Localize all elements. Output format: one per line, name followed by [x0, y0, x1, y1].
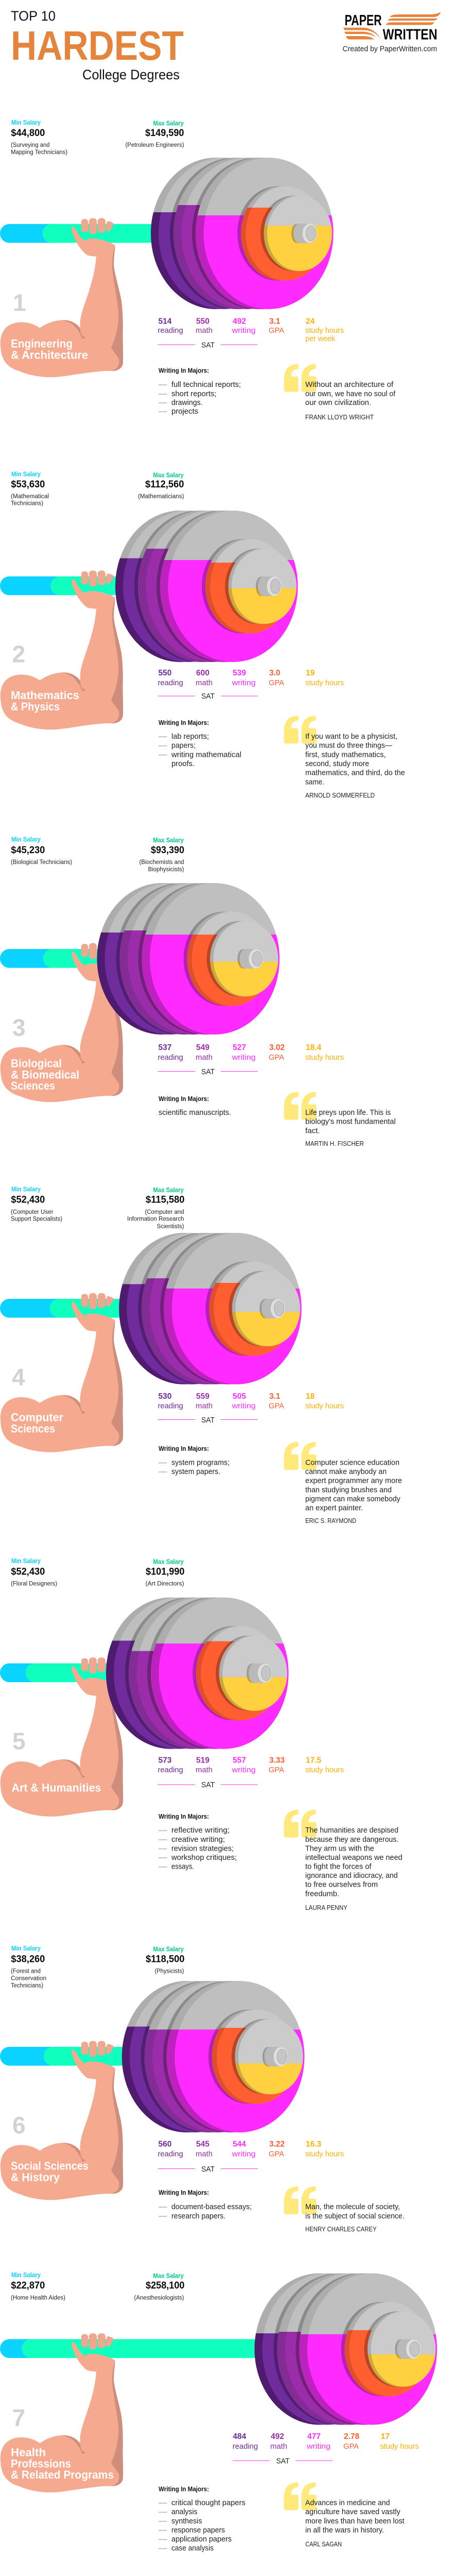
writing in majors: research papers.	[171, 2212, 225, 2221]
salary labels: $53,630	[11, 479, 45, 490]
stats: reading	[158, 1766, 183, 1774]
rank and name: 1	[13, 290, 26, 316]
salary labels	[11, 836, 184, 873]
logo: header: WRITTEN	[383, 27, 438, 43]
stats: 505	[233, 1392, 246, 1401]
stats: GPA	[269, 1402, 284, 1411]
stats	[158, 2140, 344, 2174]
quote	[284, 716, 405, 799]
stats: 492	[233, 317, 246, 326]
stats: 477	[307, 2432, 321, 2441]
stats: math	[196, 679, 213, 687]
stats	[158, 317, 344, 349]
rank and name: Engineering	[11, 337, 73, 350]
rank and name: 2	[12, 641, 25, 668]
writing in majors: creative writing;	[171, 1836, 225, 1844]
stats: 550	[159, 669, 171, 677]
salary labels: $101,990	[146, 1566, 184, 1577]
quote: Advances in medicine and	[305, 2499, 390, 2507]
rank and name: Art & Humanities	[11, 1781, 101, 1794]
quote: LAURA PENNY	[305, 1904, 347, 1911]
quote: same.	[305, 777, 324, 786]
rank and name	[11, 641, 79, 713]
writing in majors: Writing In Majors:	[159, 2485, 209, 2493]
quote	[284, 1810, 403, 1911]
writing in majors: system papers.	[171, 1468, 220, 1476]
stats: reading	[158, 679, 183, 687]
salary bar	[0, 2339, 264, 2358]
salary labels: Max Salary	[153, 120, 184, 127]
stats: 550	[196, 317, 210, 326]
writing in majors	[159, 719, 241, 768]
rank and name: & Biomedical	[11, 1068, 79, 1081]
stats: GPA	[343, 2442, 359, 2451]
stats: 17.5	[306, 1756, 322, 1765]
rank and name: Health	[11, 2446, 46, 2459]
quote	[284, 364, 396, 421]
stats: 3.22	[269, 2140, 285, 2149]
quote: you must do three things—	[305, 741, 392, 750]
rank and name: Sciences	[11, 1422, 55, 1435]
salary labels: $93,390	[151, 845, 184, 856]
stats: SAT	[201, 1416, 215, 1425]
barbell plates	[115, 511, 298, 662]
salary labels: (Anesthesiologists)	[134, 2295, 184, 2301]
salary labels	[11, 471, 184, 507]
salary bar	[0, 577, 128, 595]
stats: SAT	[276, 2456, 289, 2465]
quote: Computer science education	[305, 1458, 399, 1467]
rank and name	[11, 2404, 114, 2481]
salary labels: $52,430	[11, 1194, 45, 1206]
stats: math	[196, 1053, 213, 1062]
stats: study hours	[305, 1766, 344, 1774]
salary labels: (Art Directors)	[145, 1581, 184, 1587]
barbell plates	[122, 1981, 304, 2132]
stats: math	[196, 1766, 213, 1774]
stats: 559	[196, 1392, 210, 1401]
writing in majors: Writing In Majors:	[159, 1812, 209, 1820]
stats: writing	[232, 2149, 256, 2158]
stats	[158, 1043, 344, 1076]
panel: 4 computer sciences	[0, 1186, 402, 1524]
rank and name: & Physics	[11, 700, 60, 713]
panel: 6 social sciences and history	[0, 1945, 405, 2233]
quote	[284, 1442, 402, 1524]
salary bar	[0, 1299, 130, 1318]
quote: because they are dangerous.	[305, 1835, 398, 1844]
barbell plates	[119, 1233, 302, 1384]
quote: our own civilization.	[305, 398, 371, 407]
salary bar	[0, 2047, 131, 2066]
stats: 544	[233, 2140, 246, 2149]
salary bar	[0, 949, 108, 968]
rank and name: & History	[11, 2171, 60, 2184]
stats: 484	[233, 2432, 247, 2441]
quote: FRANK LLOYD WRIGHT	[305, 413, 374, 421]
salary labels: $44,800	[11, 128, 45, 139]
stats: math	[196, 326, 213, 335]
stats: study hours	[380, 2442, 419, 2451]
writing in majors: application papers	[171, 2535, 232, 2544]
writing in majors: Writing In Majors:	[159, 1445, 209, 1452]
writing in majors: response papers	[171, 2527, 225, 2535]
rank and name: 7	[12, 2404, 25, 2431]
stats: writing	[232, 679, 256, 687]
rank and name: & Related Programs	[11, 2468, 114, 2481]
salary labels: Max Salary	[153, 2272, 184, 2279]
stats: SAT	[201, 2165, 215, 2174]
writing in majors: short reports;	[171, 390, 216, 398]
stats: 549	[196, 1043, 210, 1052]
rank and name: Professions	[11, 2457, 71, 2470]
barbell plates	[97, 883, 280, 1035]
salary labels: $149,590	[145, 128, 184, 139]
writing in majors: document-based essays;	[171, 2203, 252, 2211]
quote: ARNOLD SOMMERFELD	[305, 791, 375, 799]
salary labels: (Computer and	[145, 1209, 184, 1215]
rank and name: Social Sciences	[11, 2160, 89, 2173]
quote: They arm us with the	[305, 1844, 374, 1853]
quote: CARL SAGAN	[305, 2540, 342, 2548]
writing in majors: revision strategies;	[171, 1844, 234, 1853]
stats: 3.33	[269, 1756, 285, 1765]
writing in majors: lab reports;	[171, 733, 209, 741]
stats: reading	[158, 1053, 183, 1062]
salary labels: (Surveying and	[11, 142, 49, 148]
quote: our own, we have no soul of	[305, 389, 396, 398]
rank and name	[11, 1014, 79, 1092]
salary labels: Max Salary	[153, 1946, 184, 1953]
rank and name: 5	[12, 1728, 26, 1755]
arm	[1, 2333, 123, 2493]
quote	[284, 2187, 405, 2233]
salary labels: Scientists)	[156, 1224, 184, 1230]
stats: GPA	[269, 679, 284, 687]
stats: GPA	[269, 1766, 284, 1774]
quote: than studying brushes and	[305, 1485, 392, 1494]
stats: SAT	[201, 1781, 215, 1789]
rank and name	[11, 2112, 89, 2184]
stats: study hours	[305, 1053, 344, 1062]
quote: an expert painter.	[305, 1504, 363, 1513]
stats: 3.02	[269, 1043, 285, 1052]
rank and name: & Architecture	[11, 348, 88, 361]
stats: 573	[159, 1756, 172, 1765]
rank and name: 3	[12, 1014, 26, 1041]
stats: math	[270, 2442, 287, 2451]
writing in majors: workshop critiques;	[171, 1854, 237, 1862]
quote	[284, 2482, 405, 2548]
panel: 2 mathematics and physics	[0, 471, 405, 799]
quote	[284, 1092, 396, 1147]
quote: The humanities are despised	[305, 1826, 398, 1835]
quote: HENRY CHARLES CAREY	[305, 2225, 377, 2233]
quote: pigment can make somebody	[305, 1495, 400, 1503]
quote: agriculture have saved vastly	[305, 2507, 400, 2516]
arm	[1, 1657, 123, 1817]
rank and name: Sciences	[11, 1079, 55, 1092]
stats: 527	[233, 1043, 246, 1052]
salary labels	[11, 1186, 184, 1230]
writing in majors: full technical reports;	[171, 381, 241, 389]
salary labels: Min Salary	[11, 2272, 41, 2279]
salary labels: $52,430	[11, 1566, 45, 1577]
salary labels	[11, 1945, 184, 1989]
rank and name: Mathematics	[11, 689, 79, 702]
quote: second, study more	[305, 759, 369, 768]
writing in majors	[159, 1095, 231, 1117]
salary labels: (Biochemists and	[139, 859, 184, 866]
stats: 24	[306, 317, 315, 326]
stats: 530	[159, 1392, 171, 1401]
salary labels: Min Salary	[11, 119, 41, 126]
arm	[1, 2041, 123, 2200]
salary labels: Information Research	[127, 1216, 184, 1223]
writing in majors	[159, 1445, 230, 1476]
quote: first, study mathematics,	[305, 750, 386, 759]
writing in majors: projects	[171, 408, 198, 416]
rank and name: 4	[12, 1364, 25, 1391]
stats	[233, 2432, 419, 2465]
stats: writing	[306, 2442, 330, 2451]
rank and name: Computer	[11, 1411, 63, 1424]
stats: 3.0	[269, 669, 281, 677]
salary labels: Technicians)	[11, 1983, 43, 1989]
rank and name	[11, 1728, 101, 1794]
quote: freedumb.	[305, 1889, 339, 1898]
writing in majors	[159, 2189, 252, 2221]
stats: 539	[233, 669, 246, 677]
rank and name	[11, 290, 88, 361]
stats: 16.3	[306, 2140, 322, 2149]
stats: GPA	[269, 2149, 284, 2158]
stats	[158, 1756, 344, 1789]
salary bar	[0, 224, 161, 243]
stats: 514	[159, 317, 172, 326]
quote: ignorance and idiocracy, and	[305, 1871, 398, 1880]
writing in majors: analysis	[171, 2508, 198, 2516]
stats: GPA	[269, 326, 284, 335]
salary bar	[0, 1663, 115, 1682]
rank and name: Biological	[11, 1057, 62, 1070]
quote: expert programmer any more	[305, 1477, 402, 1485]
writing in majors: papers;	[171, 742, 196, 750]
stats: writing	[232, 1402, 256, 1411]
quote: fact.	[305, 1126, 320, 1135]
salary labels	[11, 2272, 184, 2301]
stats: math	[196, 2149, 213, 2158]
writing in majors	[159, 2485, 246, 2553]
stats: reading	[158, 326, 183, 335]
salary labels: Min Salary	[11, 1557, 41, 1565]
stats: 557	[233, 1756, 246, 1765]
stats: reading	[158, 2149, 183, 2158]
salary labels: Max Salary	[153, 471, 184, 479]
salary labels: (Petroleum Engineers)	[126, 142, 184, 148]
salary labels: $112,560	[145, 479, 184, 490]
stats: 18	[306, 1392, 315, 1401]
salary labels: (Physicists)	[154, 1969, 184, 1975]
stats: SAT	[201, 341, 215, 349]
stats: 519	[196, 1756, 210, 1765]
rank and name	[11, 1364, 63, 1435]
salary labels: $45,230	[11, 845, 45, 856]
writing in majors: Writing In Majors:	[159, 367, 209, 374]
stats: per week	[305, 334, 335, 343]
writing in majors: proofs.	[171, 760, 195, 768]
writing in majors: Writing In Majors:	[159, 719, 209, 726]
stats: 18.4	[306, 1043, 322, 1052]
stats: 537	[159, 1043, 171, 1052]
arm	[1, 1293, 123, 1452]
stats: 19	[306, 669, 315, 677]
stats: 560	[159, 2140, 171, 2149]
writing in majors: essays.	[171, 1863, 194, 1871]
panel: 7 health professions	[0, 2272, 437, 2553]
salary labels: Mapping Technicians)	[11, 149, 67, 156]
writing in majors: reflective writing;	[171, 1826, 230, 1835]
stats	[158, 1392, 344, 1425]
writing in majors	[159, 1812, 237, 1871]
salary labels: $38,260	[11, 1954, 45, 1965]
stats: 492	[271, 2432, 284, 2441]
title: College Degrees	[82, 67, 180, 82]
writing in majors: Writing In Majors:	[159, 2189, 209, 2196]
quote: mathematics, and third, do the	[305, 769, 405, 777]
panel: 3 biological and biomedical sciences	[0, 836, 396, 1147]
logo: header	[343, 12, 441, 54]
header: title and logo	[11, 8, 441, 82]
quote: ERIC S. RAYMOND	[305, 1517, 356, 1524]
stats	[158, 669, 344, 701]
quote: to free ourselves from	[305, 1880, 378, 1889]
salary labels: Min Salary	[11, 836, 41, 843]
salary labels: Min Salary	[11, 1186, 41, 1193]
salary labels: $118,500	[146, 1954, 184, 1965]
salary labels: Min Salary	[11, 1945, 41, 1952]
salary labels: Max Salary	[153, 837, 184, 844]
writing in majors: scientific manuscripts.	[159, 1109, 231, 1117]
writing in majors: critical thought papers	[171, 2499, 246, 2507]
salary labels: Max Salary	[153, 1558, 184, 1565]
salary labels: (Forest and	[11, 1969, 41, 1975]
salary labels: Min Salary	[11, 471, 41, 478]
panel: 1 engineering and architecture	[0, 119, 396, 421]
quote: more lives than have been lost	[305, 2517, 405, 2526]
quote: Man, the molecule of society,	[305, 2202, 400, 2211]
salary labels: Conservation	[11, 1975, 46, 1981]
stats: SAT	[201, 692, 215, 701]
title: HARDEST	[11, 23, 184, 69]
logo: header: Created by PaperWritten.com	[343, 44, 437, 54]
stats: study hours	[305, 326, 344, 335]
writing in majors: system programs;	[171, 1459, 230, 1467]
quote: is the subject of social science.	[305, 2212, 405, 2221]
stats: 3.1	[269, 1392, 281, 1401]
quote: biology's most fundamental	[305, 1117, 396, 1126]
salary labels: (Mathematicians)	[138, 494, 184, 500]
writing in majors: synthesis	[171, 2517, 202, 2526]
quote: intellectual weapons we need	[305, 1853, 403, 1862]
barbell plates	[254, 2273, 437, 2425]
salary labels: $258,100	[146, 2280, 184, 2291]
quote: cannot make anybody an	[305, 1467, 387, 1476]
writing in majors: Writing In Majors:	[159, 1095, 209, 1103]
salary labels: (Computer User	[11, 1209, 54, 1215]
quote: in all the wars in history.	[305, 2526, 384, 2535]
salary labels: Technicians)	[11, 501, 43, 507]
quote: If you want to be a physicist,	[305, 732, 397, 741]
salary labels: $115,580	[146, 1194, 184, 1206]
title: TOP 10	[11, 8, 56, 24]
salary labels: (Home Health Aides)	[11, 2295, 65, 2301]
arm	[1, 218, 123, 377]
writing in majors: writing mathematical	[171, 751, 241, 759]
stats: study hours	[305, 679, 344, 687]
stats: writing	[232, 1766, 256, 1774]
writing in majors: case analysis	[171, 2545, 214, 2553]
writing in majors: drawings.	[171, 399, 203, 407]
barbell plates	[106, 1598, 288, 1749]
quote: to fight the forces of	[305, 1862, 372, 1871]
salary labels	[11, 1557, 184, 1587]
stats: 600	[196, 669, 210, 677]
stats: 2.78	[344, 2432, 360, 2441]
stats: SAT	[201, 1067, 215, 1076]
rank and name: 6	[12, 2112, 26, 2139]
title	[11, 8, 184, 82]
quote: Life preys upon life. This is	[305, 1108, 391, 1117]
stats: 545	[196, 2140, 210, 2149]
stats: writing	[232, 326, 256, 335]
stats: reading	[233, 2442, 258, 2451]
salary labels: Max Salary	[153, 1187, 184, 1194]
salary labels: (Floral Designers)	[11, 1581, 57, 1587]
salary labels: $22,870	[11, 2280, 45, 2291]
logo: header: PAPER	[345, 12, 382, 29]
stats: GPA	[269, 1053, 284, 1062]
salary labels: Biophysicists)	[148, 867, 184, 873]
quote: MARTIN H. FISCHER	[305, 1140, 364, 1147]
stats: writing	[232, 1053, 256, 1062]
salary labels: Support Specialists)	[11, 1216, 62, 1223]
stats: study hours	[305, 1402, 344, 1411]
arm	[1, 943, 123, 1102]
salary labels: (Mathematical	[11, 494, 49, 500]
arm	[1, 570, 123, 730]
barbell plates	[151, 158, 334, 309]
salary labels	[11, 119, 184, 156]
stats: math	[196, 1402, 213, 1411]
stats: study hours	[305, 2149, 344, 2158]
salary labels: (Biological Technicians)	[11, 859, 72, 866]
quote: Without an architecture of	[305, 380, 394, 389]
stats: 17	[381, 2432, 390, 2441]
stats: reading	[158, 1402, 183, 1411]
panel: 5 art and humanities	[0, 1557, 403, 1911]
writing in majors	[159, 367, 241, 416]
stats: 3.1	[269, 317, 281, 326]
